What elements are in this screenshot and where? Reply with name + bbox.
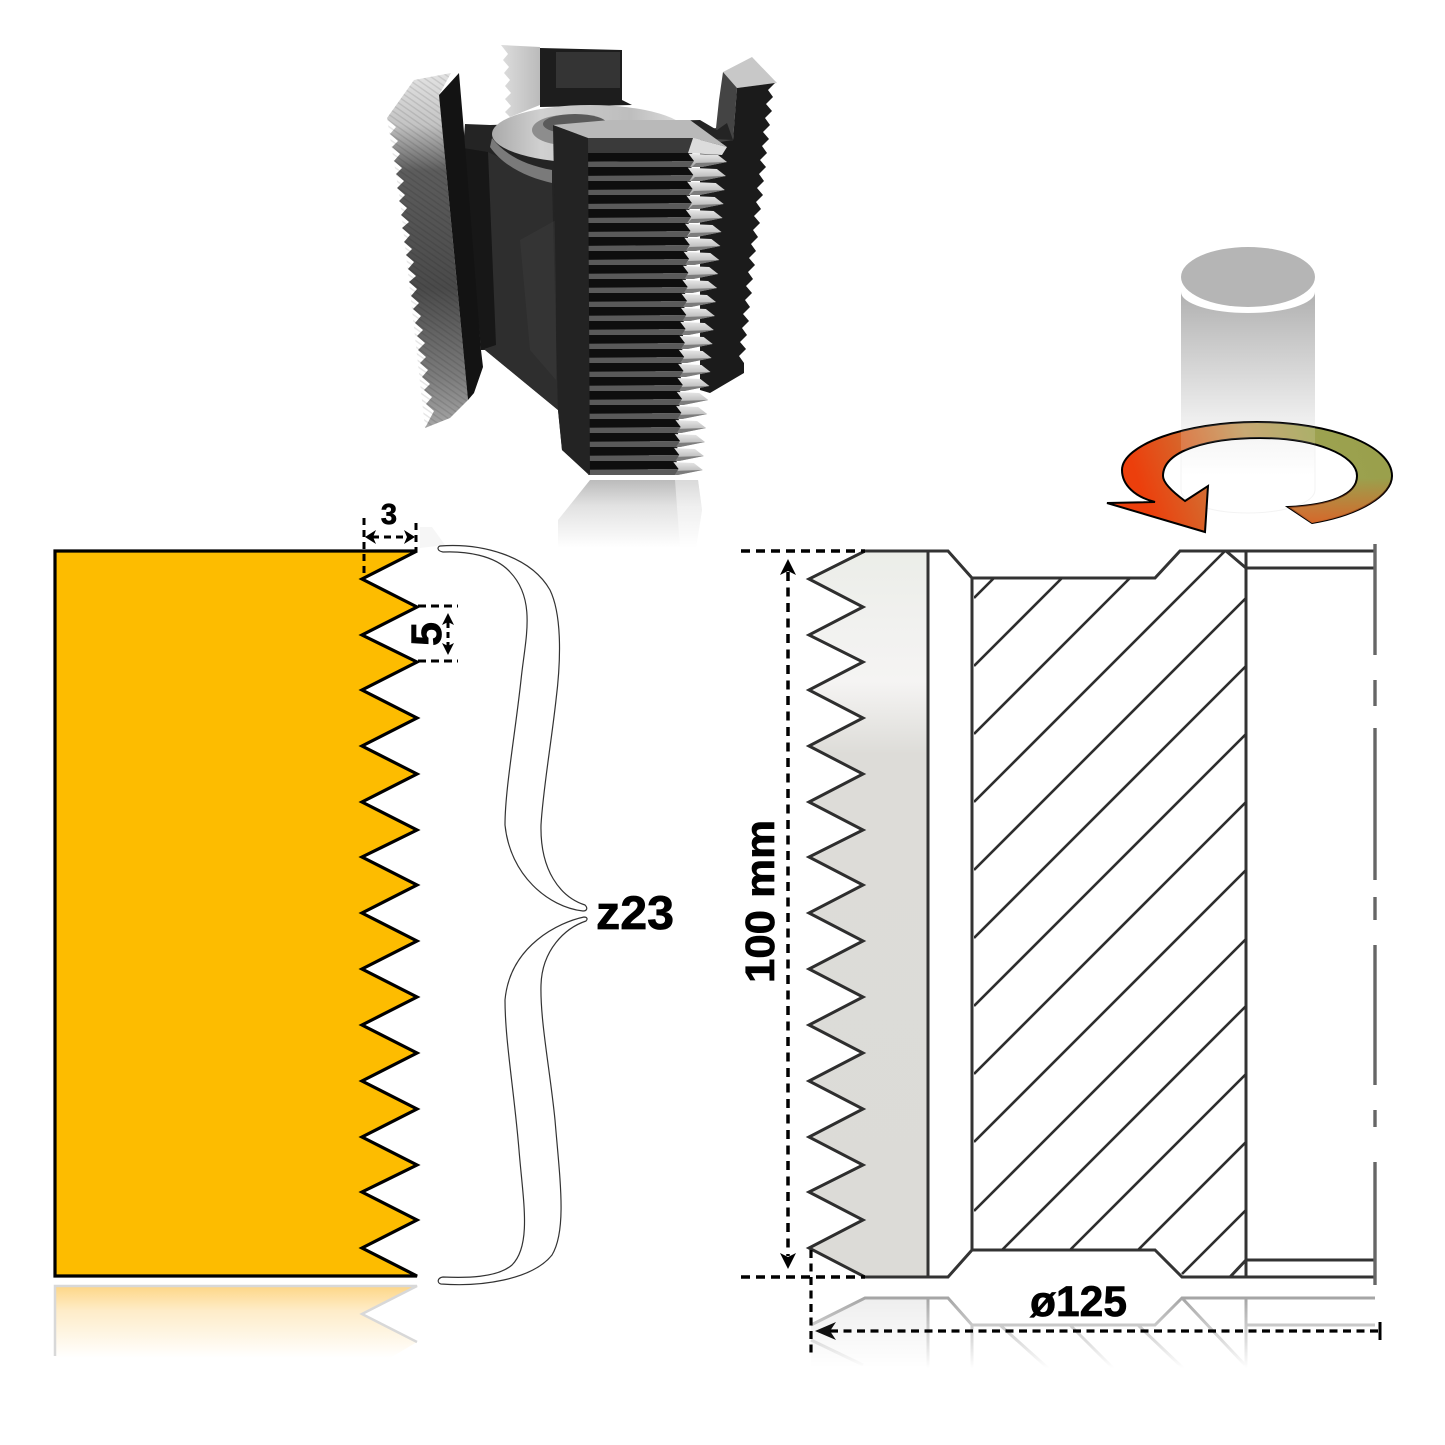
front blade side face [553, 125, 590, 475]
curly brace: top half [438, 546, 587, 911]
dimension: diameter 125 [811, 1250, 1380, 1358]
cylinder faint base outline [1181, 440, 1315, 513]
icon: rotation direction arrow [1107, 420, 1395, 532]
front blade top face [553, 120, 727, 155]
product photo: cutter head [387, 45, 777, 548]
center line [1373, 544, 1377, 1285]
section hatching [974, 551, 1246, 1274]
dimension: tooth depth 3 [364, 499, 416, 578]
dimension: diameter 125: ø125 [1030, 1278, 1127, 1326]
body outline [865, 551, 1375, 1277]
dimension: tooth pitch 5 [403, 606, 458, 661]
dimension: height 100 mm: 100 mm [737, 820, 783, 983]
right blade [700, 57, 777, 393]
cylinder top [1181, 247, 1315, 307]
back blade [501, 45, 632, 117]
icon: rotation cylinder [1181, 247, 1315, 513]
front light teeth [648, 153, 727, 475]
teeth insert with gray fill [809, 551, 928, 1277]
dimension: height 100 mm [737, 551, 865, 1277]
cylinder body [1181, 292, 1315, 513]
central disc [490, 105, 688, 183]
yellow serrated profile [55, 551, 417, 1276]
reflection of drawing [811, 1298, 1375, 1370]
cutter body [463, 120, 733, 475]
panel: cross-section drawing [737, 544, 1380, 1370]
front dark teeth [588, 153, 694, 475]
panel: tooth profile (yellow) [55, 499, 674, 1358]
reflection of yellow profile [55, 1286, 417, 1358]
dimension: tooth depth 3: 3 [381, 499, 397, 531]
curly brace: bottom half [438, 917, 587, 1285]
left blade [387, 73, 483, 428]
label: tooth count: z23 [596, 886, 674, 939]
dimension: tooth pitch 5: 5 [403, 622, 451, 646]
faint artifact [420, 527, 445, 548]
photo reflection [558, 480, 702, 548]
